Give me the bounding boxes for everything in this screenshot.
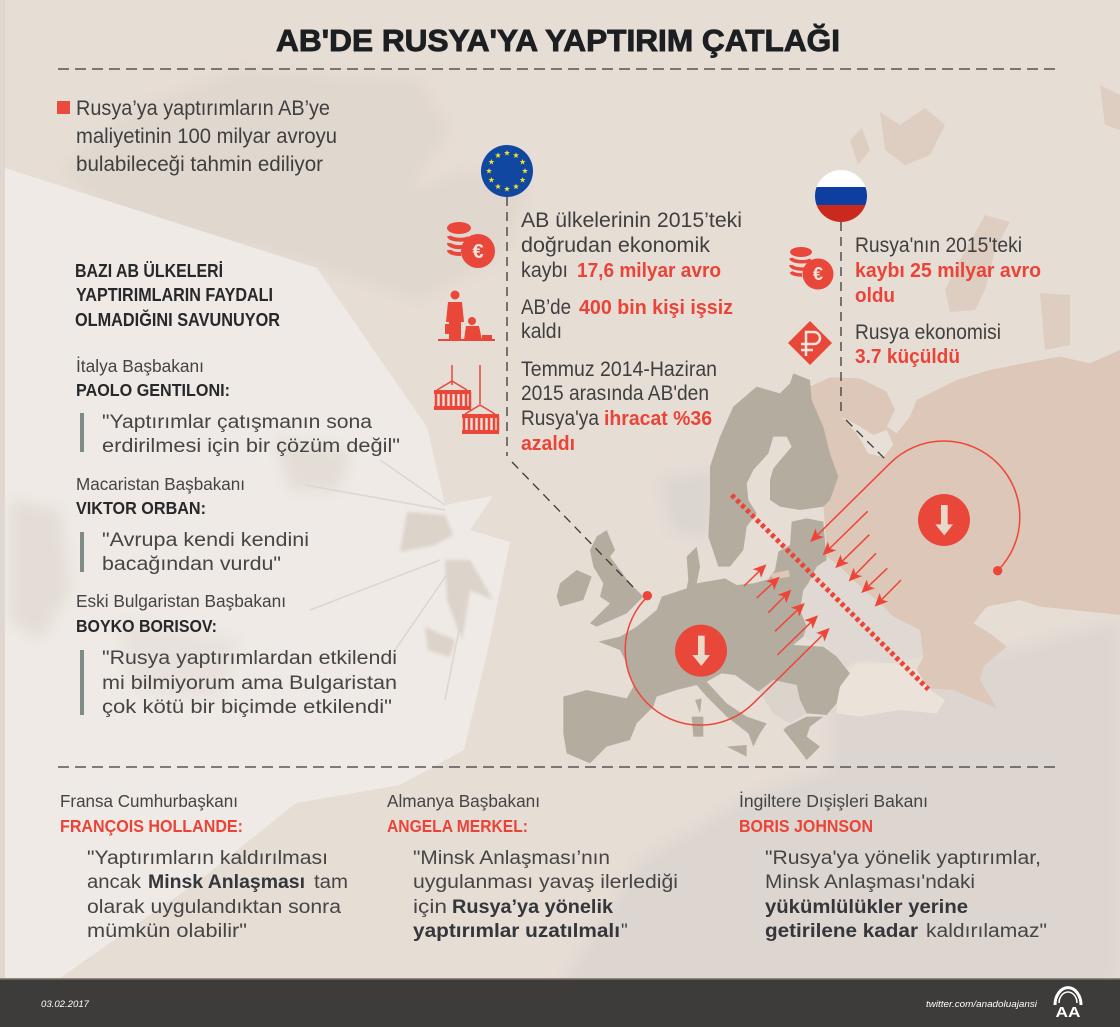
- quote: Johnson: BORIS JOHNSON: [739, 816, 873, 836]
- Russia landmass: [810, 350, 1120, 708]
- Greece: [783, 717, 823, 760]
- map of Europe and Russia: [557, 350, 1120, 763]
- quote: Orban: Macaristan Başbakanı: [76, 474, 245, 494]
- icon: cargo containers: [434, 365, 499, 434]
- quote: Borisov: BOYKO BORISOV:: [76, 616, 217, 636]
- arc start dots: [643, 566, 1002, 600]
- left heading: YAPTIRIMLARIN FAYDALI: [76, 285, 273, 305]
- quote: Gentiloni: İtalya Başbakanı: [76, 356, 204, 376]
- EU stats text: 400 bin kişi işsiz: [579, 297, 733, 319]
- quote: Borisov: [76, 591, 397, 718]
- EU down badge: [675, 625, 727, 677]
- quote: Hollande: olarak uygulandıktan sonra: [87, 897, 341, 918]
- EU stats text: kaldı: [521, 319, 562, 343]
- EU stats text: AB’de: [521, 295, 571, 319]
- divider top: [58, 68, 1061, 70]
- icon: AA logo: AA: [1056, 1004, 1081, 1021]
- icon: Russia coins and euro: €: [813, 264, 823, 284]
- quote: Merkel: ANGELA MERKEL:: [387, 816, 528, 836]
- Scandinavia: [708, 373, 838, 567]
- Russia stats text: Rusya'nın 2015'teki: [855, 233, 1022, 257]
- Russia stats text: Rusya ekonomisi: [855, 320, 1001, 344]
- footer date: 03.02.2017: [41, 999, 90, 1010]
- icon: Russia coins and euro: [790, 247, 834, 290]
- quote: Merkel: Rusya’ya yönelik: [452, 897, 613, 918]
- EU stats text: Temmuz 2014-Haziran: [521, 357, 717, 381]
- White Sea: [842, 417, 893, 457]
- polar islands: [850, 85, 1120, 350]
- EU stats text: doğrudan ekonomik: [521, 233, 710, 257]
- quote: Johnson: "Rusya'ya yönelik yaptırımlar,: [765, 848, 1041, 869]
- EU mainland: [563, 518, 850, 763]
- icon: AA logo: [1055, 988, 1081, 1021]
- quote: Orban: VIKTOR ORBAN:: [76, 498, 206, 518]
- Russia stats text: [855, 233, 1041, 368]
- Russia down badge: [918, 494, 970, 546]
- EU stats text: ihracat %36: [604, 408, 712, 430]
- quote: Borisov: Eski Bulgaristan Başbakanı: [76, 591, 286, 611]
- quote: Hollande: "Yaptırımların kaldırılması: [87, 848, 328, 869]
- EU stats text: azaldı: [521, 433, 575, 455]
- footer twitter handle: twitter.com/anadoluajansi: [926, 999, 1038, 1010]
- quote: Johnson: [739, 791, 1047, 942]
- left heading: OLMADIĞINI SAVUNUYOR: [75, 309, 280, 330]
- icon: ruble diamond: [788, 321, 832, 365]
- quote: Hollande: FRANÇOIS HOLLANDE:: [60, 816, 243, 836]
- EU leader line: [507, 197, 636, 590]
- quote: Merkel: ": [621, 921, 628, 942]
- intro bullet: [57, 96, 337, 176]
- icon: Russia flag: [815, 170, 867, 223]
- icon: EU flag: [481, 145, 533, 197]
- quote: Merkel: uygulanması yavaş ilerlediği: [413, 872, 678, 893]
- quote: Merkel: Almanya Başbakanı: [387, 791, 540, 811]
- quote: Hollande: Minsk Anlaşması: [148, 872, 305, 893]
- Ireland: [557, 570, 592, 607]
- Russia stats text: oldu: [855, 285, 895, 307]
- Mediterranean islands: [692, 698, 747, 757]
- Russia stats text: 3.7 küçüldü: [855, 346, 960, 368]
- title: AB'DE RUSYA'YA YAPTIRIM ÇATLAĞI: [276, 23, 840, 58]
- quote: Hollande: tam: [314, 872, 348, 893]
- quote: Gentiloni: erdirilmesi için bir çözüm değil": [102, 436, 400, 457]
- quote: Johnson: İngiltere Dışişleri Bakanı: [739, 791, 928, 811]
- EU stats text: [521, 208, 742, 455]
- EU stats text: AB ülkelerinin 2015’teki: [521, 208, 742, 232]
- quote: Hollande: Fransa Cumhurbaşkanı: [60, 791, 238, 811]
- light panel backdrop: [5, 168, 510, 978]
- quote: Merkel: "Minsk Anlaşması’nın: [413, 848, 610, 869]
- quote: Borisov: "Rusya yaptırımlardan etkilendi: [102, 648, 397, 669]
- quote: Johnson: Minsk Anlaşması'ndaki: [765, 872, 975, 893]
- quote: Borisov: çok kötü bir biçimde etkilendi": [102, 697, 392, 718]
- quote: Merkel: için: [413, 897, 447, 918]
- United Kingdom: [590, 530, 643, 627]
- Russia loss arrows: [812, 441, 1020, 605]
- Kaliningrad: [770, 570, 790, 579]
- EU loss arrows: [625, 566, 828, 725]
- intro bullet: Rusya’ya yaptırımların AB’ye: [76, 96, 330, 120]
- quote: Orban: bacağından vurdu": [102, 554, 281, 575]
- quote: Merkel: yaptırımlar uzatılmalı: [413, 921, 620, 942]
- quote: Orban: "Avrupa kendi kendini: [102, 530, 309, 551]
- quote: Hollande: ancak: [87, 872, 142, 893]
- Black Sea: [837, 663, 945, 717]
- Ukraine Belarus Moldova: [800, 557, 923, 670]
- intro bullet: maliyetinin 100 milyar avroyu: [76, 124, 337, 148]
- quote: Orban: [76, 474, 309, 575]
- icon: EU coins and euro: [447, 222, 495, 268]
- EU stats text: kaybı: [521, 258, 568, 282]
- Russia leader line: [841, 222, 886, 460]
- EU stats text: 17,6 milyar avro: [577, 260, 721, 282]
- left heading: BAZI AB ÜLKELERİ: [75, 261, 223, 281]
- divider bottom: [58, 766, 1061, 768]
- EU stats text: 2015 arasında AB'den: [521, 381, 709, 405]
- quote: Hollande: mümkün olabilir": [87, 921, 247, 942]
- quote: Borisov: mi bilmiyorum ama Bulgaristan: [102, 673, 397, 694]
- quote: Gentiloni: "Yaptırımlar çatışmanın sona: [102, 412, 372, 433]
- quote: Merkel: [387, 791, 678, 942]
- quote: Johnson: getirilene kadar: [765, 921, 919, 942]
- icon: unemployed person: [438, 290, 495, 341]
- icon: EU coins and euro: €: [472, 241, 484, 263]
- quote: Hollande: [60, 791, 348, 942]
- sanction frontier dotted line: [732, 495, 928, 689]
- intro bullet: bulabileceği tahmin ediliyor: [76, 152, 323, 176]
- left heading: [75, 261, 280, 330]
- quote: Johnson: kaldırılamaz": [926, 921, 1047, 942]
- Western Balkans: [750, 677, 807, 723]
- footer bar: [0, 978, 1120, 1027]
- quote: Johnson: yükümlülükler yerine: [765, 897, 968, 918]
- Russia stats text: kaybı 25 milyar avro: [855, 260, 1041, 282]
- quote: Gentiloni: [76, 356, 400, 457]
- quote: Gentiloni: PAOLO GENTILONI:: [76, 380, 230, 400]
- EU stats text: Rusya'ya: [521, 406, 599, 430]
